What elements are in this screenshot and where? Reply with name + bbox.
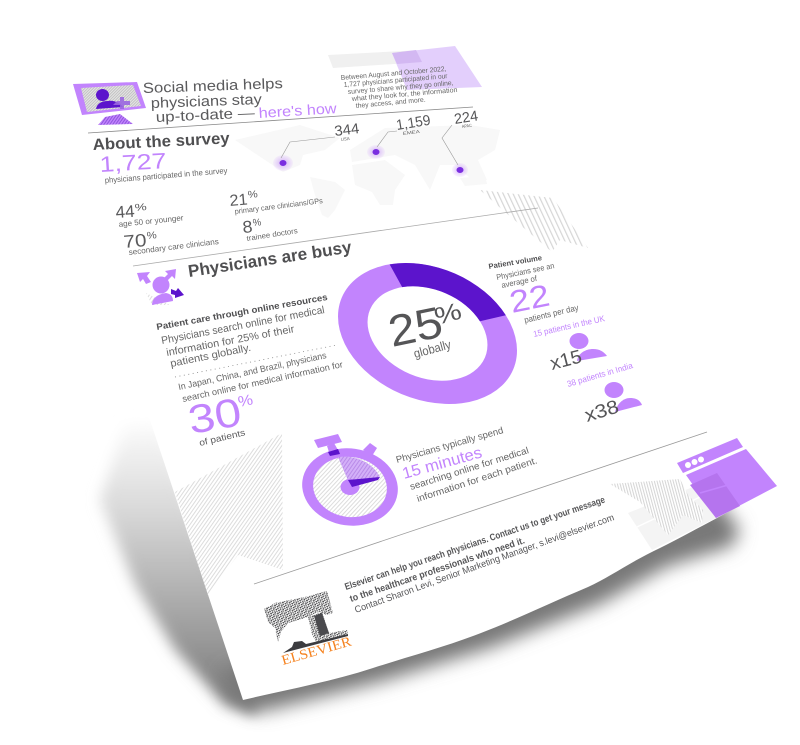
page shadow: [100, 425, 740, 716]
donut chart: 25 percent: 25: [384, 298, 447, 357]
stat: trainee doctors: %: [252, 217, 262, 229]
donut chart: 25 percent: globally: [412, 337, 453, 361]
title: here's how: [258, 101, 338, 122]
logo: Elsevier: [264, 591, 354, 669]
stat: primary care: [229, 189, 324, 216]
text block: 15 minutes: information for each patient.: [416, 455, 539, 505]
text block: 30 percent of patients: search online for medical information for: [181, 359, 344, 404]
map marker: USA: USA: [341, 136, 350, 142]
map marker: EMEA: 1,159: [395, 113, 432, 134]
stat: patients in the UK: 15 patients in the UK: [532, 313, 606, 339]
paper sheet: [72, 46, 778, 700]
donut chart: 25 percent: [338, 248, 517, 419]
text block: patient volume: Physicians see an: [496, 261, 555, 282]
intro text: [341, 66, 458, 110]
stat: secondary care: %: [146, 230, 157, 242]
map marker: USA: [273, 121, 360, 171]
intro text: what they look for, the information: [351, 87, 458, 103]
text block: patient care through online resources: [156, 292, 328, 370]
stat: total physicians: [99, 148, 228, 185]
intro text: Between August and October 2022,: [341, 66, 447, 82]
text block: 15 minutes: [395, 425, 539, 505]
call to action text: Elsevier can help you reach physicians. Contact us to get your message: [343, 495, 606, 593]
stat: primary care: 21: [229, 191, 248, 210]
icon: browser window: [677, 438, 777, 518]
decorative header panels: [328, 46, 482, 90]
text block: patient care through online resources: Patient care through online resources: [156, 292, 328, 332]
text block: patient care through online resources: Physicians search online for medical: [160, 304, 326, 347]
stat: trainee doctors: [242, 217, 299, 243]
call to action text: Contact Sharon Levi, Senior Marketing Manager, s.levi@elsevier.com: [353, 512, 616, 616]
stat: patients in the UK: [532, 313, 607, 375]
text block: patient volume: patients per day: [523, 302, 580, 325]
stat: total physicians: physicians participated in the survey: [104, 166, 228, 185]
stat: trainee doctors: 8: [242, 217, 253, 237]
text block: 30 percent of patients: of patients: [198, 427, 247, 448]
text block: 30 percent of patients: [177, 350, 344, 448]
stat: primary care: primary care clinicians/GPs: [234, 196, 324, 216]
text block: 15 minutes: Physicians typically spend: [395, 425, 505, 466]
title: [143, 76, 338, 126]
map marker: USA: 344: [334, 121, 360, 140]
stat: age: 44: [115, 202, 135, 222]
intro text: they access, and more.: [356, 97, 426, 110]
intro text: 1,727 physicians participated in our: [344, 73, 448, 89]
stat: patients in India: 38 patients in India: [566, 360, 634, 389]
world map: [235, 125, 500, 218]
text block: patient volume: Patient volume: [488, 253, 543, 271]
stat: total physicians: 1,727: [99, 148, 167, 177]
decorative gray panels and hatched arrow: [610, 479, 716, 550]
stat: secondary care: secondary care clinicians: [128, 237, 219, 257]
stat: trainee doctors: trainee doctors: [246, 226, 299, 243]
text block: patient volume: average of: [501, 274, 538, 290]
map marker: APAC: [442, 108, 479, 177]
map marker: APAC: APAC: [462, 123, 473, 129]
map marker: EMEA: EMEA: [403, 129, 420, 136]
title: Social media helps: [143, 76, 283, 97]
icon: stopwatch: [297, 434, 403, 532]
stat: patients in the UK: x15: [548, 346, 584, 375]
map marker: EMEA: [367, 113, 432, 159]
stat: age: %: [134, 202, 147, 214]
stat: patients in India: [566, 360, 642, 427]
title: physicians stay: [151, 92, 263, 112]
stat: age: [115, 202, 184, 229]
text block: 30 percent of patients: %: [237, 391, 254, 411]
text block: patient care through online resources: information for 25% of their: [165, 323, 296, 359]
section heading: physicians are busy: Physicians are busy: [187, 237, 353, 281]
stat: age: age 50 or younger: [118, 213, 184, 229]
text block: patient volume: [488, 253, 580, 325]
stat: patients in India: x38: [582, 397, 621, 427]
text block: 15 minutes: 15 minutes: [401, 444, 484, 483]
section heading: about the survey: About the survey: [92, 130, 230, 154]
map marker: APAC: 224: [453, 108, 479, 128]
text block: patient care through online resources: patients globally.: [169, 342, 252, 370]
logo: Elsevier: ELSEVIER: [280, 634, 354, 669]
left hatched arrow: [175, 433, 283, 595]
stat: primary care: %: [247, 189, 258, 201]
donut chart: 25 percent: %: [432, 298, 465, 331]
top right hatched arrow: [480, 190, 588, 252]
text block: 15 minutes: searching online for medical: [409, 445, 530, 493]
icon: computer monitor with physician: [73, 82, 146, 125]
text block: 30 percent of patients: 30: [185, 390, 245, 443]
text block: patient volume: 22: [506, 278, 553, 320]
title: up-to-date —: [155, 105, 256, 126]
icon: busy physician: [137, 269, 184, 305]
text block: 30 percent of patients: In Japan, China, and Brazil, physicians: [177, 350, 328, 392]
call to action text: to the healthcare professionals who need it.: [348, 535, 526, 605]
stat: secondary care: [123, 230, 219, 257]
intro text: survey to share why they go online,: [348, 80, 454, 96]
stat: secondary care: 70: [123, 230, 147, 252]
